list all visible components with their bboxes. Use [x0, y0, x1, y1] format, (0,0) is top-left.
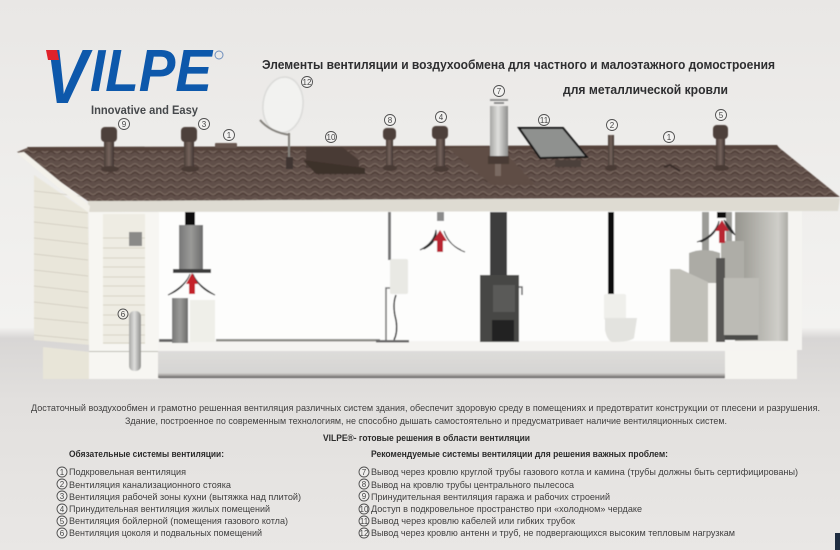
list: recommended: Доступ в подкровельное пространство при «холодном» чердаке	[371, 504, 642, 515]
left side wall siding	[34, 175, 90, 379]
kitchen hood	[173, 212, 211, 273]
chimney flashing	[448, 147, 535, 185]
roof vent 4	[432, 126, 449, 172]
logo: VILPE: ILPE	[90, 38, 214, 104]
list: recommended: Вывод через кровлю круглой трубы газового котла и камина (трубы должны быть сертифицированы)	[371, 467, 798, 478]
front wall	[89, 212, 159, 379]
wood stove and flue	[480, 212, 522, 342]
list: mandatory: Вентиляция канализационного стояка	[69, 480, 232, 491]
roof	[17, 146, 840, 201]
list: recommended	[359, 467, 798, 539]
subtitle: для металлической кровли	[563, 82, 728, 97]
arrows: boiler airflow	[697, 212, 735, 243]
number markers on drawing: 1	[667, 133, 672, 142]
kitchen cabinet and stove	[159, 298, 380, 343]
list: recommended: Вывод через кровлю кабелей или гибких трубок	[371, 516, 576, 527]
list: recommended: Принудительная вентиляция гаража и рабочих строений	[371, 492, 610, 503]
house cross-section	[17, 75, 840, 379]
intro text: Здание, построенное по современным технологиям, не способно дышать самостоятельно и предусматривает наличие вентиляционных систем.	[125, 416, 727, 427]
roof vent 9	[101, 127, 119, 172]
list: mandatory: Принудительная вентиляция жилых помещений	[69, 504, 270, 515]
number markers on drawing: 4	[439, 113, 444, 122]
list: recommended: 9	[362, 492, 367, 501]
number markers on drawing	[118, 76, 726, 319]
number markers on drawing: 11	[540, 116, 549, 125]
heading: recommended: Рекомендуемые системы вентиляции для решения важных проблем:	[371, 449, 668, 460]
number markers on drawing: 1	[227, 131, 232, 140]
list: recommended: 7	[362, 468, 367, 477]
arrows: room airflow	[420, 230, 465, 252]
satellite dish	[260, 75, 306, 169]
intro text	[31, 403, 820, 427]
number markers on drawing: 10	[327, 133, 336, 142]
solar panel	[519, 128, 587, 167]
roof vent 8	[383, 128, 397, 171]
ridge vent 1	[215, 143, 237, 148]
title: Элементы вентиляции и воздухообмена для частного и малоэтажного домостроения	[262, 57, 775, 72]
number markers on drawing: 9	[122, 120, 127, 129]
list: recommended: Вывод через кровлю антенн и труб, не подвергающихся высоким тепловым нагрузкам	[371, 528, 735, 539]
boiler room rear wall	[735, 212, 789, 342]
roof hatch 10	[303, 147, 365, 174]
icon: wall vent	[129, 232, 142, 246]
number markers on drawing: 6	[121, 310, 126, 319]
corner mark	[835, 533, 840, 550]
ventilation conduit and switch box	[376, 212, 409, 342]
right footing	[725, 350, 797, 379]
panel: recommended systems	[359, 449, 798, 539]
list: mandatory: Подкровельная вентиляция	[69, 467, 186, 478]
chimney pipe 7	[488, 100, 509, 176]
list: mandatory: 1	[60, 468, 65, 477]
number markers on drawing: 7	[497, 87, 502, 96]
list: mandatory: 2	[60, 480, 65, 489]
basement vent pipe	[129, 311, 141, 371]
list: mandatory: 4	[60, 505, 65, 514]
wall grille	[437, 212, 444, 221]
list: recommended: Вывод на кровлю трубы центрального пылесоса	[371, 480, 575, 491]
number markers on drawing: 2	[610, 121, 615, 130]
list: recommended: 12	[360, 529, 369, 538]
arrows: kitchen airflow	[168, 273, 215, 295]
roof fascia	[88, 198, 840, 212]
roof vent 3	[181, 127, 199, 172]
logo: VILPE	[44, 34, 223, 120]
list: recommended: 10	[360, 505, 369, 514]
interior	[158, 205, 790, 345]
list: mandatory: 6	[60, 529, 65, 538]
number markers on drawing: 5	[719, 111, 724, 120]
floor surface	[158, 341, 788, 351]
boiler room equipment	[670, 212, 759, 342]
roof vent 2	[605, 135, 617, 171]
list: recommended: 8	[362, 480, 367, 489]
list: mandatory: 3	[60, 492, 65, 501]
gable barge board	[17, 152, 90, 213]
sewer stack and toilet	[604, 212, 637, 342]
VILPE solutions line: VILPE®- готовые решения в области вентиляции	[323, 433, 530, 444]
heading: mandatory: Обязательные системы вентиляции:	[69, 449, 224, 460]
cable gland	[664, 165, 680, 171]
logo: VILPE: V	[44, 34, 93, 120]
intro text: Достаточный воздухообмен и грамотно решенная вентиляция различных систем здания, обеспечит здоровую среду в помещениях и предотвратит конструкции от плесени и разрушения.	[31, 403, 820, 414]
number markers on drawing: 12	[303, 78, 312, 87]
floor slab	[158, 350, 726, 378]
number markers on drawing: 3	[202, 120, 207, 129]
list: mandatory: Вентиляция бойлерной (помещения газового котла)	[69, 516, 288, 527]
right wall post	[788, 211, 802, 350]
logo tagline: Innovative and Easy	[91, 103, 198, 117]
roof ridge	[27, 145, 780, 151]
list: recommended: 11	[360, 517, 369, 526]
list: mandatory: Вентиляция цоколя и подвальных помещений	[69, 528, 262, 539]
roof vent 5	[713, 125, 729, 171]
list: mandatory: Вентиляция рабочей зоны кухни (вытяжка над плитой)	[69, 492, 301, 503]
list: mandatory: 5	[60, 517, 65, 526]
list: mandatory	[57, 467, 301, 539]
number markers on drawing: 8	[388, 116, 393, 125]
panel: mandatory systems	[57, 449, 301, 539]
